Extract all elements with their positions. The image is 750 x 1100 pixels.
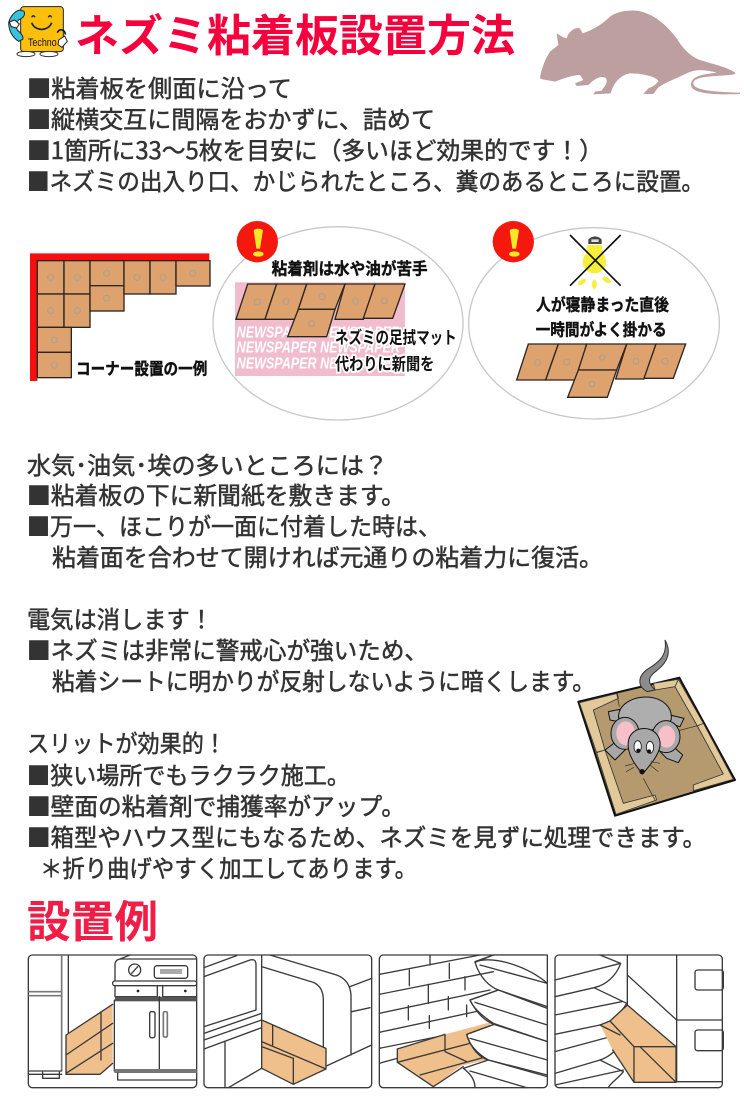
panel: kitchen stove example — [28, 955, 197, 1088]
caption: often caught within an hour: 一時間がよく掛かる — [536, 320, 667, 340]
caption: adhesive weak to water and oil: 粘着剤は水や油が苦手 — [272, 259, 428, 279]
text block: slit is effective — [27, 724, 706, 884]
caption: right after people go to sleep: 人が寝静まった直後 — [536, 295, 669, 315]
icon: warning badge — [493, 221, 534, 262]
text block: turn off lights — [27, 600, 595, 697]
panel: brick wall and bags example — [379, 955, 547, 1088]
heading: lights: 電気は消します！ — [27, 600, 213, 635]
diagram: corner installation — [30, 253, 210, 381]
line: folding note: ＊折り曲げやすく加工してあります。 — [40, 849, 417, 884]
diagram: newspaper under boards oval: NEWSPAPER NEWSPAPER — [237, 324, 400, 341]
icon: crossed out light bulb — [570, 235, 621, 289]
icon: warning badge — [237, 221, 278, 262]
diagram: newspaper under boards oval: NEWSPAPER NEWSPAPER — [237, 340, 400, 357]
panel: bags and box-type board example — [555, 955, 723, 1088]
icon: Techno mascot logo: Techno — [28, 37, 57, 49]
line: wary: ■ネズミは非常に警戒心が強いため、 — [27, 631, 428, 666]
line: newspaper: ■粘着板の下に新聞紙を敷きます。 — [27, 476, 405, 511]
line: capture rate: ■壁面の粘着剤で捕獲率がアップ。 — [27, 787, 405, 822]
caption: newspaper as foot mat: 代わりに新聞を — [335, 354, 434, 374]
line: box type: ■箱型やハウス型にもなるため、ネズミを見ずに処理できます。 — [27, 818, 706, 853]
step 3: ■1箇所に33～5枚を目安に（多いほど効果的です！） — [27, 131, 603, 166]
step 1: ■粘着板を側面に沿って — [27, 69, 292, 104]
icon: mouse on glue trap — [578, 640, 735, 816]
caption: newspaper as foot mat: ネズミの足拭マット — [335, 327, 457, 347]
heading: installation examples: 設置例 — [27, 898, 158, 947]
panel: wall corner example — [204, 955, 372, 1088]
boards — [517, 344, 686, 397]
heading: slit: スリットが効果的！ — [27, 724, 226, 759]
line: dust: ■万一、ほこりが一面に付着した時は、 — [27, 507, 441, 542]
caption: newspaper as foot mat — [335, 327, 457, 374]
caption: corner example: コーナー設置の一例 — [76, 360, 207, 379]
diagram: newspaper under boards oval — [213, 221, 463, 420]
title: ネズミ粘着板設置方法 — [75, 12, 515, 61]
line: darken: 粘着シートに明かりが反射しないように暗くします。 — [52, 662, 595, 697]
diagram: after lights out oval — [469, 221, 719, 419]
icon: rat silhouette — [540, 11, 740, 94]
icon: Techno mascot logo — [9, 7, 67, 57]
text block: setup steps — [27, 69, 704, 197]
line: restore: 粘着面を合わせて開ければ元通りの粘着力に復活。 — [52, 538, 603, 573]
text block: moisture, oil and dust — [27, 446, 603, 573]
heading: moisture: 水気･油気･埃の多いところには？ — [27, 446, 388, 481]
line: narrow places: ■狭い場所でもラクラク施工。 — [27, 756, 350, 791]
step 4: ■ネズミの出入り口、かじられたところ、糞のあるところに設置。 — [27, 162, 704, 197]
step 2: ■縦横交互に間隔をおかずに、詰めて — [27, 100, 435, 135]
diagram: newspaper under boards oval: NEWSPAPER NEWSPAPER — [237, 356, 400, 373]
